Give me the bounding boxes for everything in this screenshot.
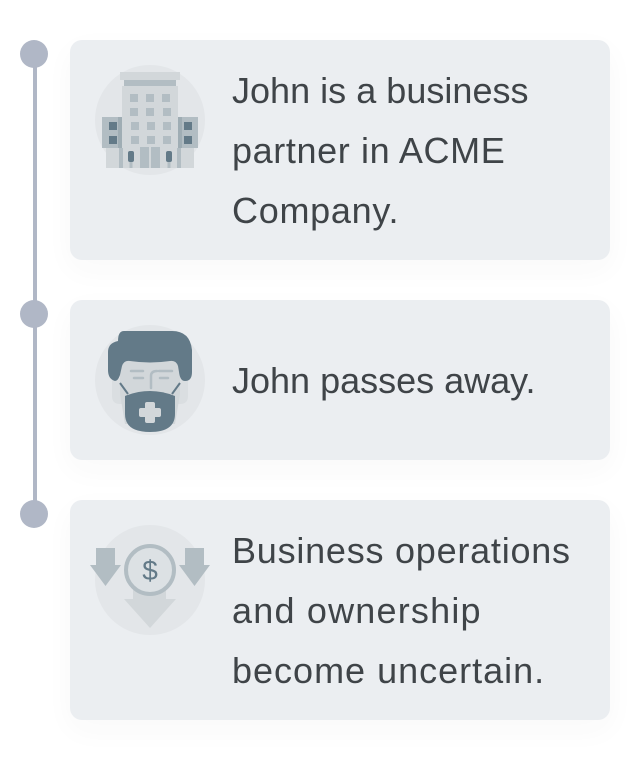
text: step 1 description: partner in ACME [232, 130, 505, 171]
icon: dollar coin with falling arrows: $ [142, 555, 158, 586]
text: step 3 description: become uncertain. [232, 650, 545, 691]
icon: dollar coin with falling arrows [90, 525, 210, 635]
panel: step 2 card [70, 300, 610, 460]
text: step 1 description: John is a business [232, 70, 529, 111]
icon: office building [95, 65, 205, 175]
panel: step 3 card [70, 500, 610, 720]
timeline [20, 40, 48, 528]
icon: man wearing medical mask [95, 325, 205, 435]
text: step 3 description: and ownership [232, 590, 482, 631]
text: step 2 description: John passes away. [232, 360, 536, 401]
text: step 3 description [232, 530, 571, 691]
panel: step 1 card [70, 40, 610, 260]
text: step 1 description [232, 70, 529, 231]
text: step 3 description: Business operations [232, 530, 571, 571]
text: step 1 description: Company. [232, 190, 399, 231]
